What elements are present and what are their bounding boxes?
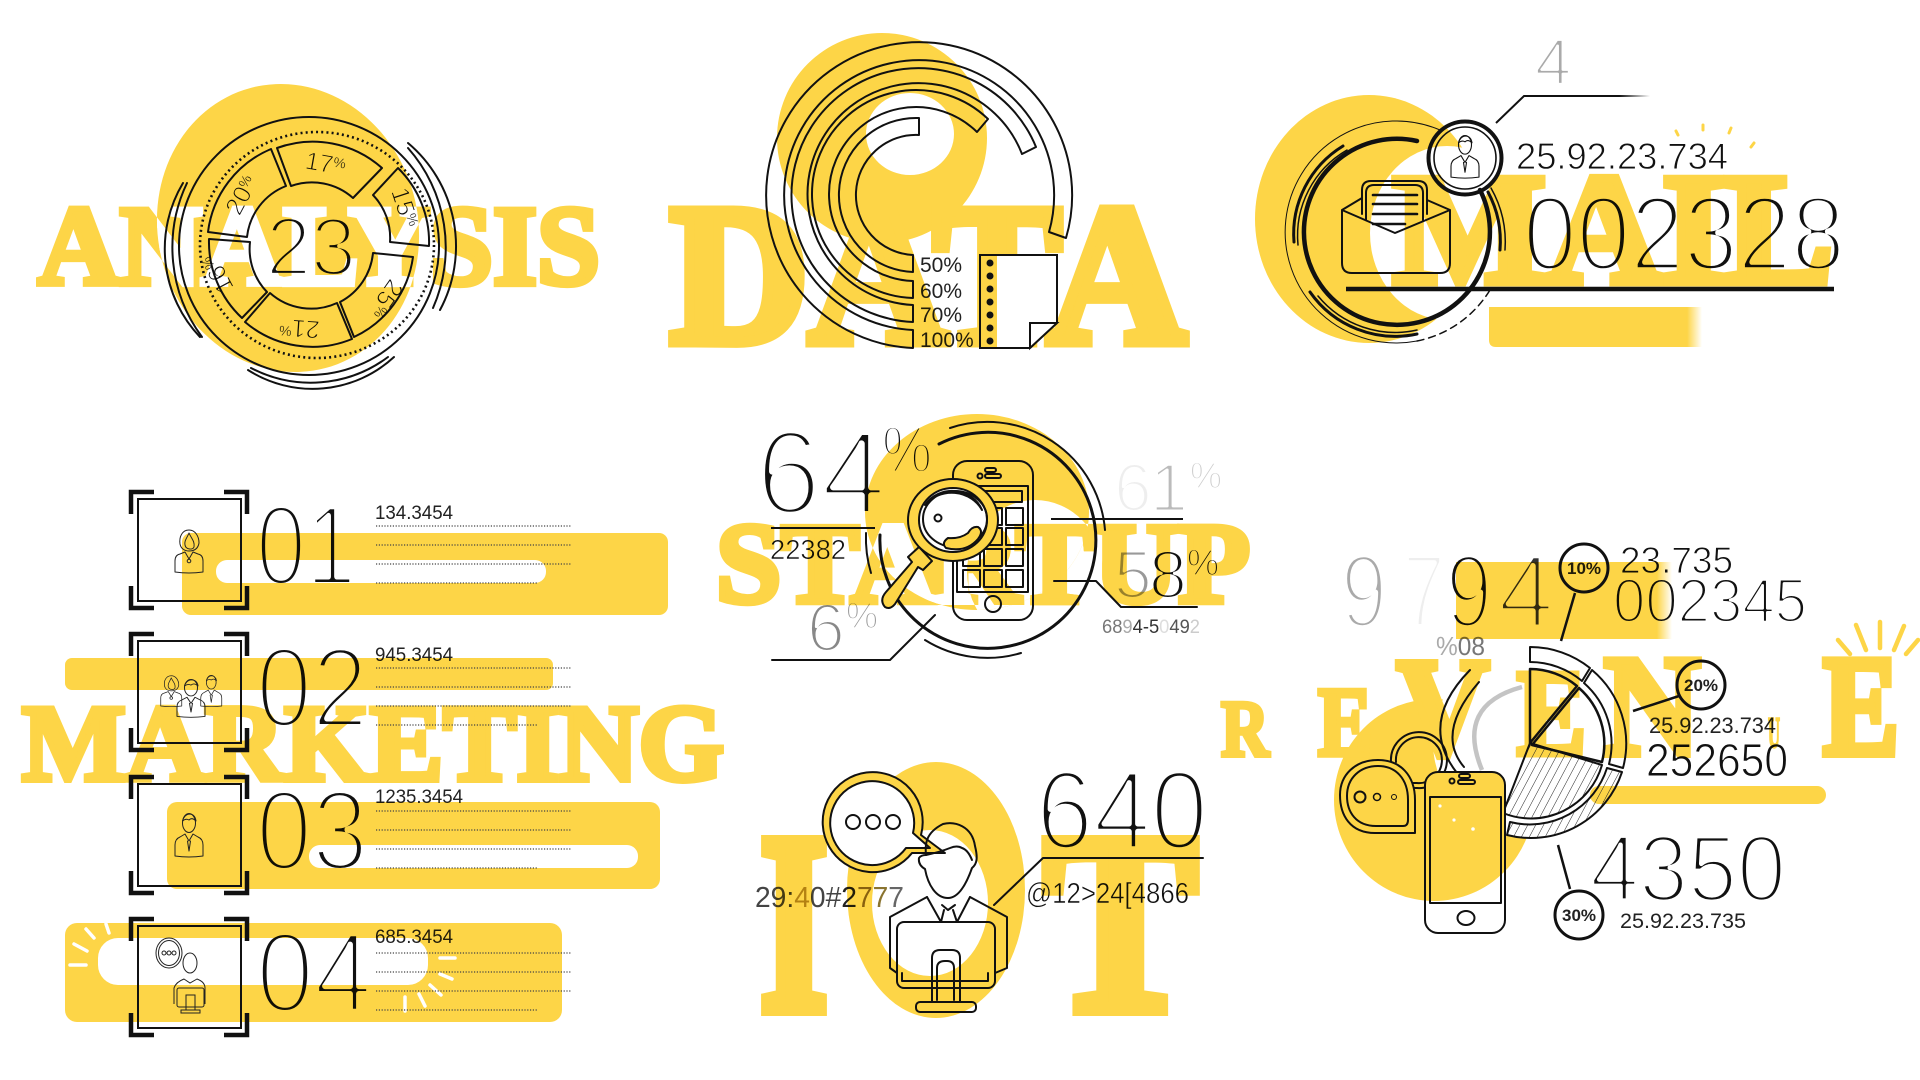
faded value: 97: 7	[1403, 534, 1445, 650]
segment labels: 15	[385, 184, 420, 219]
number: 01	[256, 483, 356, 610]
dotted lines	[376, 811, 571, 868]
heading letter: O ring	[847, 762, 1025, 1018]
yellow pill	[1590, 786, 1826, 804]
icon: person with monitor	[890, 823, 1007, 1012]
stat: 58%: %	[1187, 542, 1219, 583]
faded value: 97: 9	[1446, 534, 1492, 650]
heading restored inside arch	[967, 524, 1102, 606]
heading: REVENUE: E	[1823, 627, 1899, 785]
value left: 29:40#2777	[755, 882, 904, 914]
stat: 61%: %	[1190, 455, 1222, 496]
faded value: 97	[1341, 534, 1554, 650]
faded value: 97: 9	[1341, 534, 1387, 650]
stat: 61%: 6	[1114, 450, 1152, 526]
inner box	[138, 499, 241, 601]
stat: 58%: 5	[1114, 537, 1152, 613]
stat: 6%	[772, 590, 935, 666]
icon: envelope	[1342, 181, 1450, 273]
segment labels: %	[332, 154, 347, 172]
stat: 58%	[1054, 537, 1219, 638]
segment labels	[196, 147, 424, 343]
segment labels: 21	[291, 313, 321, 343]
panel: analysis	[36, 84, 598, 390]
grey value: 4	[1535, 25, 1571, 98]
crown sparks	[1838, 622, 1918, 654]
sparks	[1676, 125, 1754, 147]
inner box	[138, 641, 241, 743]
stat: 64%: 22382	[770, 534, 846, 565]
heading: MARKETING: MARKETING	[22, 683, 724, 804]
value: 002345: 002345	[1613, 567, 1807, 636]
value: 25.92.23.735: 25.92.23.735	[1620, 910, 1746, 933]
stat: 6%: %	[846, 595, 878, 636]
row 02	[131, 625, 571, 752]
segment labels: %	[371, 303, 391, 322]
stat: 58%: 6894-50492	[1102, 617, 1200, 638]
stat: 64%: 64	[756, 406, 886, 540]
value: 4350: 4350	[1590, 816, 1786, 922]
frame	[131, 919, 247, 1035]
circular rings	[1285, 121, 1505, 343]
icon: phone	[953, 461, 1033, 620]
ring labels: 100%	[920, 329, 974, 352]
faded value: 97: 4	[1498, 534, 1554, 650]
stat: 6%: 6	[807, 590, 845, 666]
icon: person at computer	[156, 938, 205, 1013]
panel: mail	[1255, 25, 1845, 347]
callout: 20%	[1633, 661, 1725, 711]
panel: startup	[716, 406, 1250, 666]
callout: 30%: 30%	[1562, 906, 1596, 925]
panel: data	[670, 33, 1186, 386]
frame	[131, 492, 247, 608]
icon: notepad	[980, 255, 1057, 348]
value: 1235.3454	[375, 787, 463, 808]
value: %08: %08	[1436, 631, 1485, 661]
segment labels: 17	[303, 147, 335, 179]
yellow rectangle	[1456, 562, 1672, 639]
yellow ring behind chart	[777, 33, 987, 243]
heading: REVENUE	[1221, 627, 1899, 785]
heading: MAIL: MAIL	[1393, 142, 1833, 316]
white arch	[968, 500, 1086, 610]
ring labels: 70%	[920, 304, 962, 327]
value: 685.3454	[375, 927, 453, 948]
segment labels: %	[279, 323, 292, 339]
value: 134.3454	[375, 503, 453, 524]
wheel segments	[208, 142, 429, 347]
icon: phone	[1424, 771, 1506, 934]
panel: revenue	[1221, 534, 1918, 939]
icon: team	[161, 675, 222, 717]
heading letter: T: T	[1044, 783, 1197, 1065]
stat: 58%: 8	[1149, 537, 1187, 613]
sparks	[70, 924, 455, 1011]
yellow disc behind wheel	[125, 54, 451, 402]
dotted lines	[376, 668, 571, 725]
heading: REVENUE: E	[1318, 668, 1372, 777]
stat: 64%	[756, 406, 932, 565]
callout: 10%	[1560, 544, 1608, 641]
left arcs	[1440, 670, 1479, 773]
number: 03	[256, 768, 368, 895]
leader line	[1496, 96, 1650, 123]
heading knock-out inside disc	[872, 523, 1088, 605]
heading: ANALYSIS: ANALYSIS	[38, 184, 600, 309]
dotted lines	[376, 953, 571, 1010]
white counter	[1370, 146, 1524, 320]
stat: 61%: 1	[1150, 450, 1188, 526]
yellow disc	[865, 414, 1089, 610]
inner box	[138, 926, 241, 1028]
frame	[131, 634, 247, 750]
pie chart	[1503, 647, 1626, 838]
icon: man	[175, 814, 203, 857]
white pie backing	[1433, 646, 1625, 838]
arcs	[866, 422, 1105, 658]
callout: 10%: 10%	[1567, 559, 1601, 578]
yellow disc	[1334, 699, 1534, 901]
heading letter: I: I	[760, 783, 828, 1065]
yellow disc	[1255, 95, 1483, 343]
value: 25.92.23.734: 25.92.23.734	[1649, 713, 1776, 738]
segment labels: 20	[220, 182, 258, 220]
yellow bar	[1489, 307, 1702, 347]
number: 04	[256, 910, 372, 1037]
icon: magnifier	[882, 479, 998, 608]
concentric progress rings	[766, 42, 1072, 348]
number: 02	[256, 625, 368, 752]
icon: magnifier with person	[1428, 122, 1502, 194]
icon: woman	[175, 530, 203, 573]
segment labels: %	[235, 172, 255, 190]
icon: chat bubble	[1340, 732, 1447, 833]
center value: 23	[266, 200, 356, 293]
large value: 002328	[1523, 175, 1845, 293]
row 04	[131, 910, 571, 1037]
ring labels	[920, 254, 974, 352]
value: 252650: 252650	[1646, 734, 1788, 786]
heading knock-out inside disc	[156, 206, 419, 288]
white bar insets	[98, 560, 638, 985]
heading: REVENUE: V	[1397, 631, 1489, 785]
row 01	[131, 483, 571, 610]
ring labels: 60%	[920, 280, 962, 303]
heading: REVENUE: N	[1604, 627, 1700, 785]
segment labels: 16	[202, 260, 240, 298]
grey arc	[1474, 687, 1522, 770]
panel: marketing	[22, 483, 724, 1037]
stat: 61%	[1051, 450, 1222, 526]
segment labels: 25	[370, 274, 409, 313]
underline	[1346, 287, 1834, 291]
segment labels: %	[198, 254, 218, 273]
callout: 30%	[1555, 845, 1603, 939]
panel: iot	[755, 748, 1208, 1065]
inner box	[138, 784, 241, 886]
segment labels: %	[403, 211, 422, 228]
row 03	[131, 768, 571, 895]
icon: speech bubble	[823, 772, 945, 872]
large value: 640	[1036, 748, 1208, 873]
address value: 25.92.23.734	[1516, 136, 1728, 177]
yellow bars	[65, 533, 668, 1022]
callout: 20%: 20%	[1684, 676, 1718, 695]
heading: REVENUE: R	[1221, 684, 1270, 774]
value right: @12>24[4866	[1026, 878, 1189, 910]
value: 23.735: 23.735	[1620, 540, 1733, 581]
heading: DATA: DATA	[670, 165, 1186, 386]
dotted lines	[376, 526, 571, 583]
stat: 64%: %	[882, 412, 932, 486]
value: 945.3454	[375, 645, 453, 666]
heading: STARTUP: STARTUP	[716, 500, 1250, 627]
heading: REVENUE: U	[1768, 710, 1780, 757]
frame	[131, 777, 247, 893]
heading: REVENUE: E	[1517, 646, 1586, 781]
outer rings	[165, 117, 456, 389]
leader line	[994, 858, 1203, 905]
ring labels: 50%	[920, 254, 962, 277]
